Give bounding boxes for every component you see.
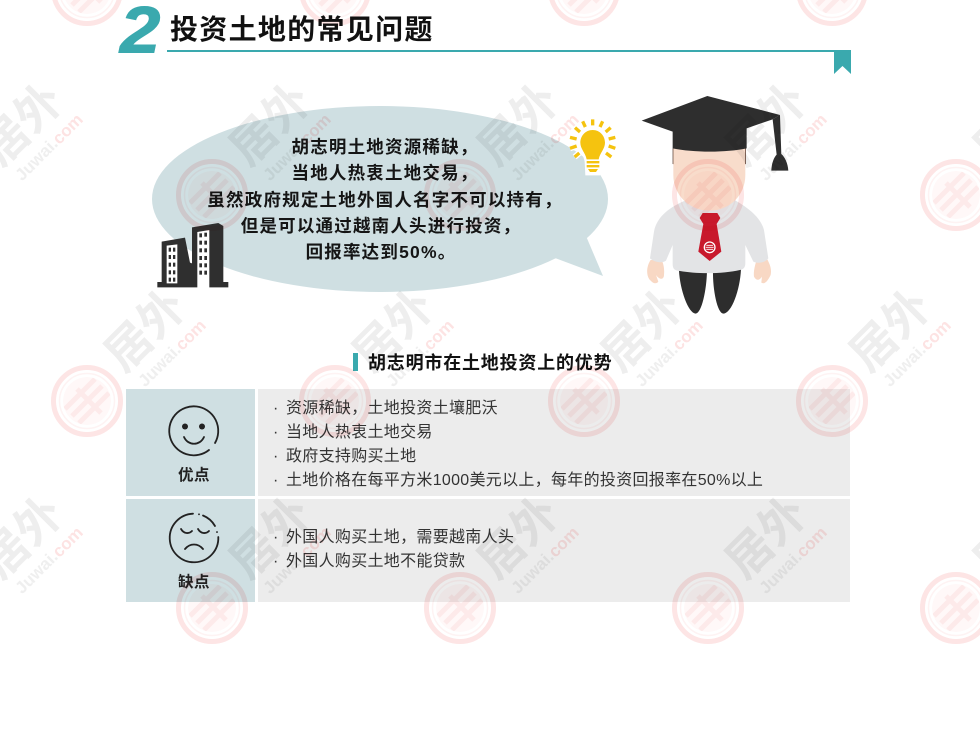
disadvantages list: 外国人购买土地不能贷款 (286, 552, 465, 570)
section heading: 胡志明市在土地投资上的优势 (368, 352, 612, 373)
title: 投资土地的常见问题 (170, 14, 434, 45)
advantages list: 当地人热衷土地交易 (286, 423, 433, 441)
label: advantages: 优点 (178, 465, 210, 484)
face (673, 148, 745, 211)
advantages list: · (273, 424, 279, 441)
advantages list: 资源稀缺，土地投资土壤肥沃 (286, 398, 498, 417)
watermark layer: Juwai.com (135, 316, 209, 390)
watermark layer: 居外 (94, 279, 196, 381)
watermark layer: 居外 (219, 73, 321, 175)
advantages list: 土地价格在每平方米1000美元以上，每年的投资回报率在50%以上 (286, 471, 763, 489)
label: disadvantages: 缺点 (178, 572, 210, 591)
watermark layer: Juwai.com (508, 110, 582, 184)
title rule with ribbon (167, 50, 851, 74)
watermark layer: Juwai.com (756, 523, 830, 597)
panel: disadvantages (126, 499, 850, 602)
watermark layer: Juwai.com (508, 523, 582, 597)
speech text: 回报率达到50%。 (306, 242, 456, 262)
watermark layer: 居外 (467, 73, 569, 175)
advantages list (273, 398, 763, 489)
icon: smile (169, 406, 218, 455)
disadvantages list (273, 528, 514, 570)
watermark layer: Juwai.com (260, 110, 334, 184)
tie badge (704, 241, 716, 253)
advantages list: · (273, 472, 279, 489)
speech text: 当地人热衷土地交易， (292, 163, 478, 183)
speech bubble (152, 106, 608, 292)
tassel (771, 115, 788, 171)
panel: advantages (126, 389, 850, 496)
icon: buildings (157, 223, 228, 288)
shirt (650, 199, 768, 273)
icon: sad (170, 514, 218, 562)
advantages list: · (273, 448, 279, 465)
watermark layer: Juwai.com (880, 316, 954, 390)
cap (642, 96, 780, 152)
hair (673, 148, 746, 166)
watermark layer: Juwai.com (383, 316, 457, 390)
tie (698, 213, 721, 261)
icon: light bulb (570, 119, 615, 175)
watermark layer: Juwai.com (260, 523, 334, 597)
advantages list: 政府支持购买土地 (286, 447, 416, 465)
legs (679, 269, 741, 314)
watermark layer: Juwai.com (756, 110, 830, 184)
watermark layer: 居外 (219, 486, 321, 588)
watermark layer: 居外 (839, 279, 941, 381)
watermark layer: 居外 (342, 279, 444, 381)
disadvantages list: · (273, 529, 279, 546)
watermark layer: Juwai.com (12, 110, 86, 184)
advantages list: · (273, 400, 279, 417)
watermark layer: 居外 (715, 73, 817, 175)
watermark layer: 居外 (591, 279, 693, 381)
disadvantages list: · (273, 553, 279, 570)
speech text (207, 137, 563, 262)
watermark layer: 居外 (715, 486, 817, 588)
watermark layer: Juwai.com (12, 523, 86, 597)
watermark layer: 居外 (467, 486, 569, 588)
figure: graduate (642, 96, 788, 314)
speech text: 但是可以通过越南人头进行投资， (241, 216, 521, 236)
speech text: 胡志明土地资源稀缺， (292, 137, 478, 157)
watermark layer: Juwai.com (632, 316, 706, 390)
speech text: 虽然政府规定土地外国人名字不可以持有， (207, 190, 563, 210)
hands (647, 259, 771, 283)
disadvantages list: 外国人购买土地，需要越南人头 (286, 528, 514, 546)
